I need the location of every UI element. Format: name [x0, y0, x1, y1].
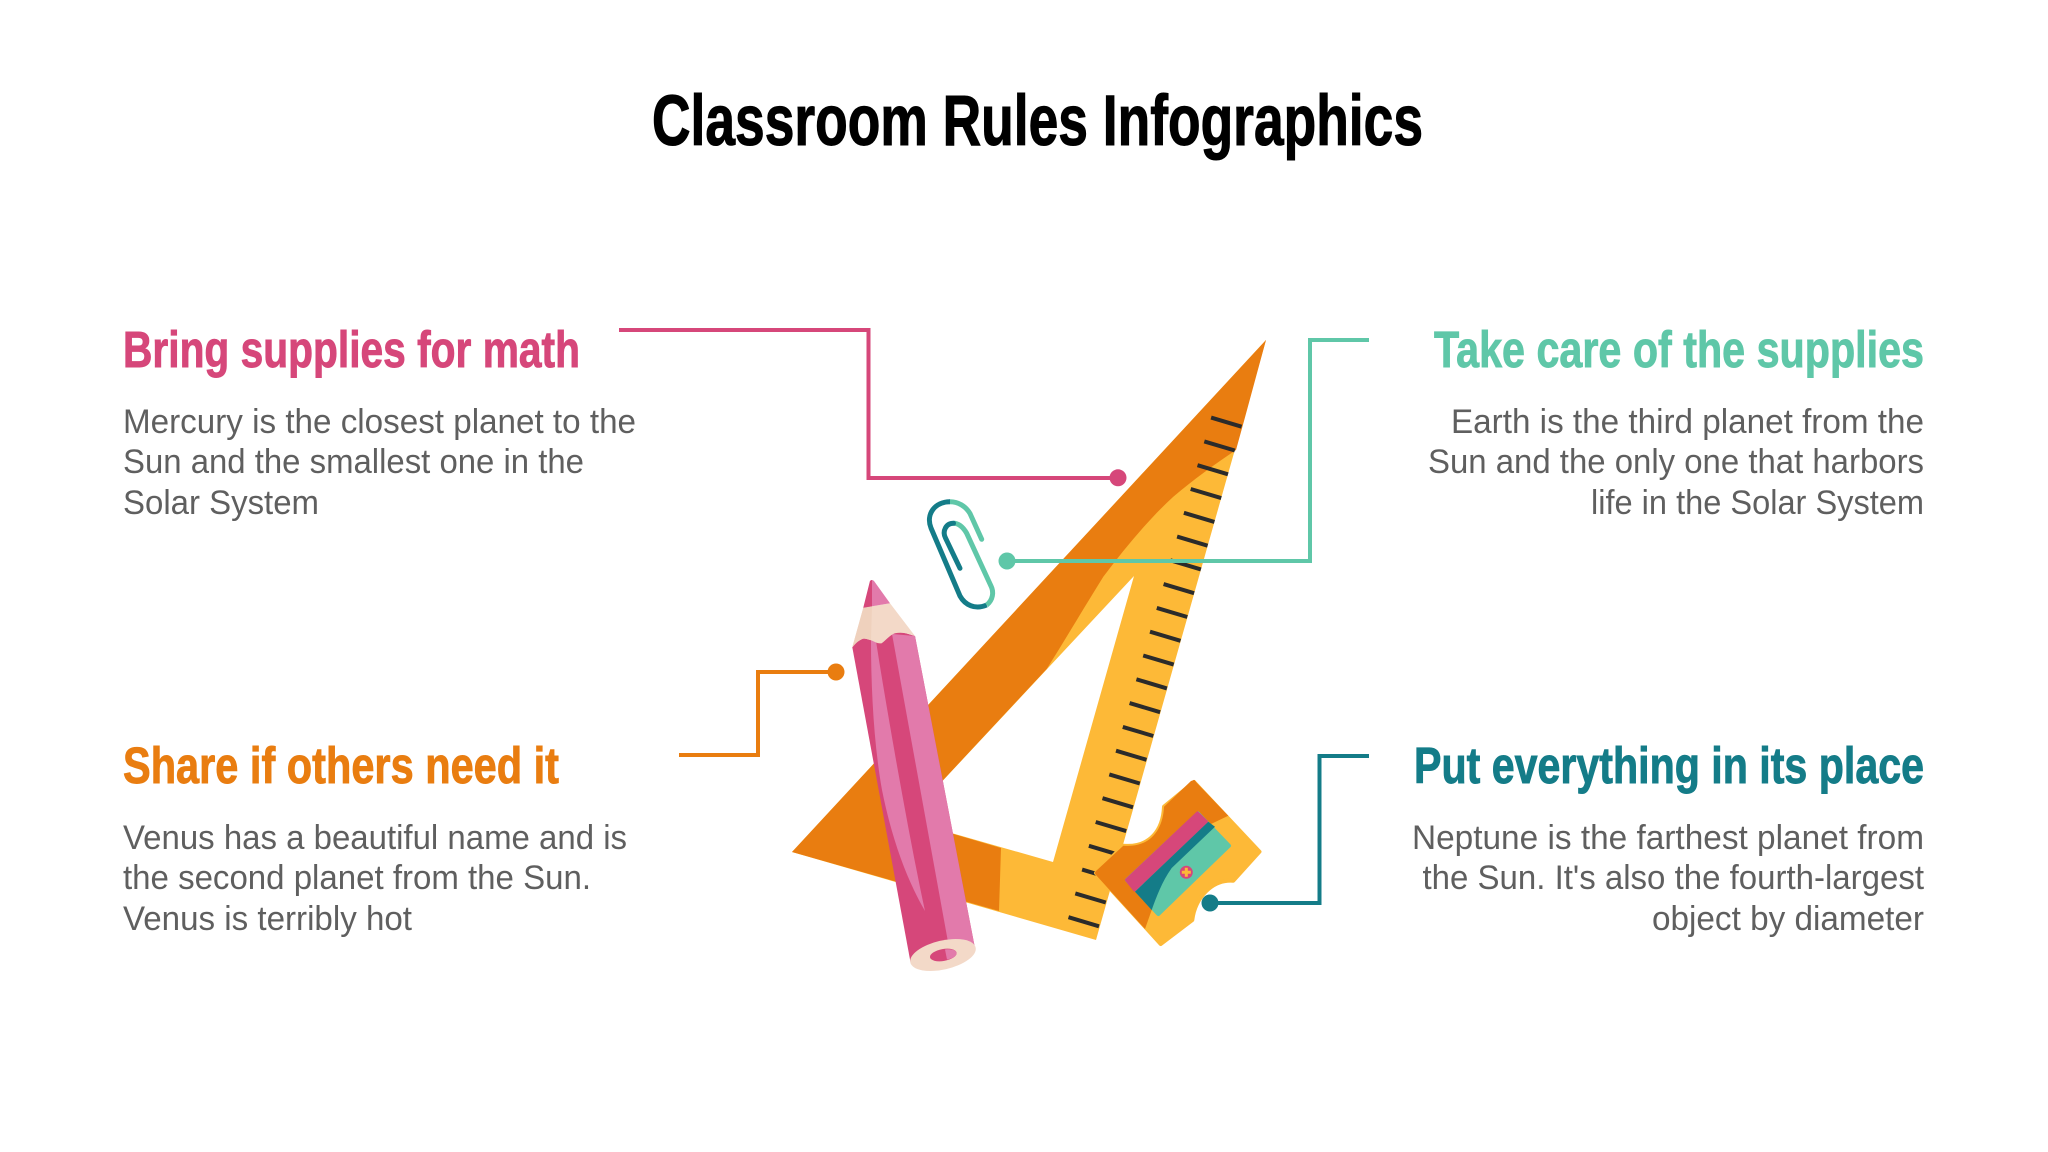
- pencil lead: [863, 580, 890, 608]
- heading: share: Share if others need it: [123, 737, 559, 794]
- text block: mercury: Sun and the smallest one in the: [123, 443, 584, 481]
- text block: mercury: Solar System: [123, 484, 319, 522]
- heading: put everything: Put everything in its place: [1414, 737, 1924, 794]
- text block: neptune: [1412, 819, 1925, 938]
- panel: take care of the supplies: [1428, 321, 1924, 522]
- text block: earth: Sun and the only one that harbors: [1428, 443, 1924, 481]
- icon: set square ruler: [792, 340, 1266, 940]
- text block: mercury: [123, 403, 636, 522]
- title: Classroom Rules Infographics: [652, 82, 1423, 161]
- text block: neptune: Neptune is the farthest planet from: [1412, 819, 1924, 857]
- text block: earth: [1428, 403, 1924, 522]
- panel: share if others need it: [123, 737, 627, 938]
- text block: earth: Earth is the third planet from the: [1451, 403, 1924, 441]
- panel: put everything in its place: [1412, 737, 1925, 938]
- heading: bring supplies: Bring supplies for math: [123, 321, 580, 378]
- pencil wood shade: [852, 606, 872, 647]
- pencil end core: [929, 947, 958, 963]
- pencil wood tip: [852, 603, 915, 647]
- text block: venus: the second planet from the Sun.: [123, 859, 591, 897]
- text block: mercury: Mercury is the closest planet to the: [123, 403, 636, 441]
- ruler yellow base: [792, 340, 1266, 940]
- icon: paper clip: [929, 502, 993, 607]
- sharpener blade: [1127, 814, 1229, 914]
- ruler orange overlay: [792, 340, 1266, 911]
- text block: venus: Venus is terribly hot: [123, 900, 413, 938]
- pencil highlight: [871, 640, 925, 911]
- text block: earth: life in the Solar System: [1591, 484, 1924, 522]
- screw plus: [1182, 868, 1191, 877]
- heading: take care: Take care of the supplies: [1434, 321, 1924, 378]
- connector: teal: [1202, 756, 1369, 912]
- connector: orange: [679, 664, 844, 755]
- ruler tick marks: [1068, 418, 1242, 926]
- pencil lead shade: [863, 580, 872, 608]
- pencil light stripe: [892, 634, 975, 948]
- pencil end: [907, 933, 979, 977]
- pencil end core light half: [945, 949, 957, 960]
- icon: pencil: [852, 580, 979, 977]
- text block: venus: Venus has a beautiful name and is: [123, 819, 627, 857]
- connector: green: [998, 340, 1369, 570]
- sharpener yellow body: [1096, 782, 1260, 944]
- blade teal band: [1135, 822, 1215, 910]
- text block: neptune: object by diameter: [1652, 900, 1924, 938]
- icon: pencil sharpener: [1095, 780, 1260, 944]
- text block: venus: [123, 819, 627, 938]
- connector: pink: [619, 330, 1126, 486]
- panel: bring supplies for math: [123, 321, 636, 522]
- pencil body: [852, 630, 975, 963]
- text block: neptune: the Sun. It's also the fourth-largest: [1422, 859, 1925, 897]
- sharpener screw: [1180, 866, 1193, 879]
- sharpener orange shade: [1095, 780, 1228, 929]
- blade pink band: [1126, 813, 1206, 890]
